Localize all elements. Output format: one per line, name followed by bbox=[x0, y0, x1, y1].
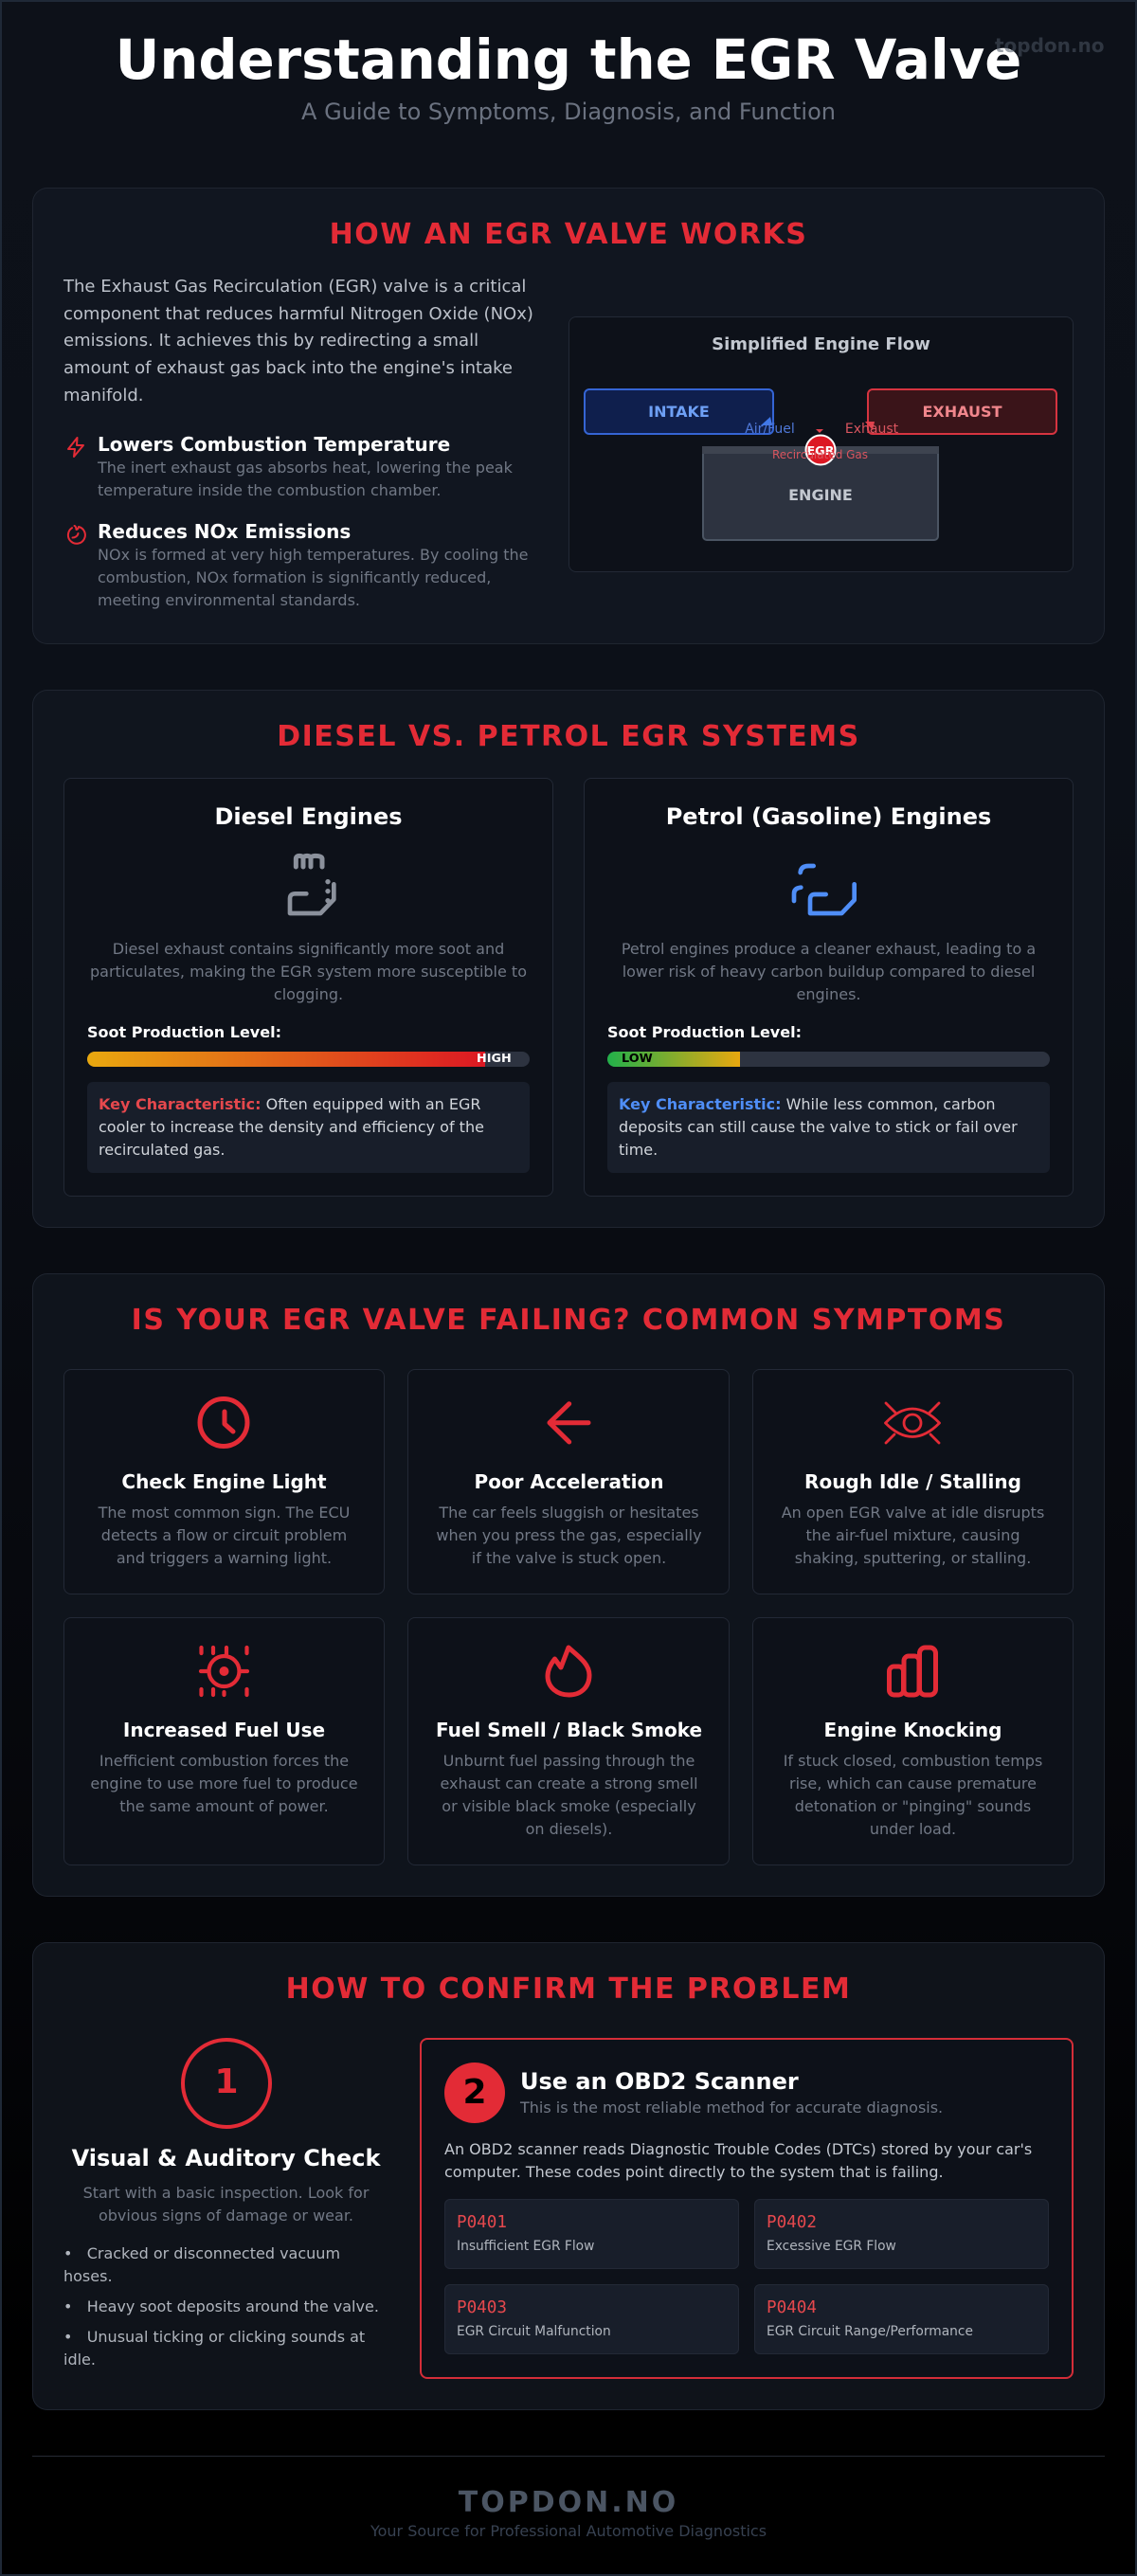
meaning: EGR Circuit Malfunction bbox=[457, 2324, 611, 2339]
bullet 3 bbox=[63, 2328, 365, 2369]
description bbox=[622, 940, 1036, 1003]
EGR valve: EGR bbox=[806, 444, 835, 459]
intro text: emissions. It achieves this by redirecting a small bbox=[63, 331, 478, 351]
step 2 badge: 2 bbox=[462, 2073, 487, 2112]
key text: Key Characteristic: Often equipped with an EGR bbox=[99, 1095, 481, 1113]
symptom title: Increased Fuel Use bbox=[123, 1719, 325, 1741]
icon: gauge gear bbox=[199, 1645, 250, 1698]
icon: flame bbox=[546, 1645, 591, 1698]
symptom text: the same amount of power. bbox=[119, 1797, 329, 1815]
heading: HOW TO CONFIRM THE PROBLEM bbox=[286, 1973, 851, 2006]
icon: diesel pump bbox=[288, 853, 336, 915]
benefit description: NOx is formed at very high temperatures. By cooling the bbox=[98, 546, 528, 564]
symptom text: or visible black smoke (especially bbox=[442, 1797, 696, 1815]
step 1: visual check bbox=[63, 2038, 381, 2369]
heading: DIESEL VS. PETROL EGR SYSTEMS bbox=[277, 720, 860, 753]
key characteristic bbox=[87, 1082, 530, 1173]
symptom text: detects a flow or circuit problem bbox=[101, 1526, 347, 1544]
heading: IS YOUR EGR VALVE FAILING? COMMON SYMPTOMS bbox=[132, 1304, 1005, 1337]
symptom text: when you press the gas, especially bbox=[436, 1526, 702, 1544]
symptom text bbox=[782, 1504, 1044, 1567]
symptom text: detonation or "pinging" sounds bbox=[795, 1797, 1031, 1815]
flow arrows bbox=[761, 417, 875, 433]
code P0403 bbox=[444, 2284, 739, 2354]
benefit description bbox=[97, 459, 513, 499]
symptom text: if the valve is stuck open. bbox=[472, 1549, 666, 1567]
code: P0403 bbox=[457, 2298, 507, 2317]
soot bar: low bbox=[607, 1052, 1050, 1067]
code: P0404 bbox=[767, 2298, 817, 2317]
key text: deposits can still cause the valve to stick or fail over bbox=[619, 1118, 1018, 1136]
symptom text: and triggers a warning light. bbox=[117, 1549, 332, 1567]
symptom: check engine light bbox=[63, 1369, 385, 1594]
benefit description bbox=[98, 546, 528, 609]
diagram title: Simplified Engine Flow bbox=[712, 334, 930, 354]
description: clogging. bbox=[274, 985, 343, 1003]
symptom text: An open EGR valve at idle disrupts bbox=[782, 1504, 1044, 1522]
icon: clock bbox=[197, 1396, 250, 1449]
engine box bbox=[702, 446, 939, 540]
symptom: increased fuel use bbox=[63, 1617, 385, 1865]
panel: simplified engine flow diagram bbox=[568, 316, 1074, 572]
icon: eye bbox=[884, 1402, 941, 1444]
symptom text: the air-fuel mixture, causing bbox=[805, 1526, 1020, 1544]
symptom: rough idle bbox=[752, 1369, 1074, 1594]
symptom text: The car feels sluggish or hesitates bbox=[439, 1504, 699, 1522]
EGR valve bbox=[805, 436, 836, 464]
bullet 1: • Cracked or disconnected vacuum bbox=[63, 2244, 340, 2262]
symptom text: Unburnt fuel passing through the bbox=[443, 1752, 695, 1770]
step 1 text: Start with a basic inspection. Look for bbox=[83, 2184, 369, 2202]
step 2 subtitle: This is the most reliable method for accurate diagnosis. bbox=[520, 2099, 943, 2117]
heading: HOW AN EGR VALVE WORKS bbox=[330, 218, 807, 251]
symptom text: on diesels). bbox=[526, 1820, 612, 1838]
soot label: Soot Production Level: bbox=[607, 1023, 802, 1041]
icon: flame in circle bbox=[66, 525, 86, 545]
symptom text bbox=[436, 1504, 702, 1567]
key text: cooler to increase the density and efficiency of the bbox=[99, 1118, 484, 1136]
step 2 text: An OBD2 scanner reads Diagnostic Trouble Codes (DTCs) stored by your car's bbox=[444, 2140, 1032, 2158]
symptom title: Engine Knocking bbox=[824, 1719, 1002, 1741]
exhaust box: EXHAUST bbox=[923, 403, 1002, 421]
panel: diesel vs petrol bbox=[32, 690, 1105, 1228]
meaning: EGR Circuit Range/Performance bbox=[767, 2324, 973, 2339]
step 1 text: obvious signs of damage or wear. bbox=[99, 2207, 353, 2225]
intro text: The Exhaust Gas Recirculation (EGR) valve is a critical bbox=[63, 277, 526, 297]
intro text bbox=[63, 277, 533, 405]
panel: diesel engines bbox=[63, 778, 553, 1197]
watermark: topdon.no bbox=[995, 34, 1105, 57]
key text bbox=[99, 1095, 484, 1159]
benefit description: temperature inside the combustion chamber. bbox=[98, 481, 442, 499]
bar label: LOW bbox=[622, 1052, 653, 1066]
step 1 title: Visual & Auditory Check bbox=[72, 2145, 380, 2171]
description: Diesel exhaust contains significantly more soot and bbox=[113, 940, 504, 958]
description: engines. bbox=[796, 985, 860, 1003]
symptom: engine knocking bbox=[752, 1617, 1074, 1865]
code: P0402 bbox=[767, 2213, 817, 2232]
bullet 3: idle. bbox=[63, 2351, 96, 2369]
symptom text: shaking, sputtering, or stalling. bbox=[795, 1549, 1031, 1567]
symptom text: engine to use more fuel to produce bbox=[90, 1774, 358, 1792]
description: Petrol engines produce a cleaner exhaust, leading to a bbox=[622, 940, 1036, 958]
flow chart bbox=[584, 388, 1057, 541]
symptom title: Poor Acceleration bbox=[475, 1470, 663, 1493]
panel: how an EGR valve works bbox=[32, 188, 1105, 644]
panel: how to confirm bbox=[32, 1942, 1105, 2410]
step 1 badge: 1 bbox=[214, 2063, 239, 2101]
bullet 1: hoses. bbox=[63, 2267, 113, 2285]
code: P0401 bbox=[457, 2213, 507, 2232]
benefit description: combustion, NOx formation is significantly reduced, bbox=[98, 568, 491, 586]
benefit heading: Lowers Combustion Temperature bbox=[98, 433, 450, 456]
engine box: ENGINE bbox=[788, 486, 853, 504]
bar label: HIGH bbox=[477, 1052, 512, 1066]
symptom title: Check Engine Light bbox=[121, 1470, 327, 1493]
key characteristic bbox=[607, 1082, 1050, 1173]
step 2: OBD2 scanner bbox=[420, 2038, 1074, 2379]
code P0402 bbox=[754, 2199, 1049, 2269]
flow labels: Recirculated Gas bbox=[772, 448, 868, 461]
key text: time. bbox=[619, 1141, 658, 1159]
symptom title: Fuel Smell / Black Smoke bbox=[436, 1719, 702, 1741]
step 2 text bbox=[444, 2140, 1032, 2181]
bullet list bbox=[63, 2244, 379, 2369]
card heading: Petrol (Gasoline) Engines bbox=[666, 803, 991, 830]
symptom text: Inefficient combustion forces the bbox=[99, 1752, 349, 1770]
bullet 3: • Unusual ticking or clicking sounds at bbox=[63, 2328, 365, 2346]
footer brand: TOPDON.NO bbox=[459, 2486, 678, 2519]
card heading: Diesel Engines bbox=[214, 803, 403, 830]
intake box: INTAKE bbox=[648, 403, 710, 421]
bullet 2: • Heavy soot deposits around the valve. bbox=[63, 2297, 379, 2315]
symptom title: Rough Idle / Stalling bbox=[804, 1470, 1021, 1493]
symptom text: exhaust can create a strong smell bbox=[440, 1774, 698, 1792]
symptom text: The most common sign. The ECU bbox=[99, 1504, 350, 1522]
description: particulates, making the EGR system more susceptible to bbox=[90, 963, 527, 981]
symptom text: If stuck closed, combustion temps bbox=[784, 1752, 1042, 1770]
intro text: amount of exhaust gas back into the engine's intake bbox=[63, 358, 513, 378]
benefit: lowers combustion temperature bbox=[97, 433, 513, 499]
benefit description: meeting environmental standards. bbox=[98, 591, 360, 609]
panel: petrol engines bbox=[584, 778, 1074, 1197]
flow labels: Air/Fuel bbox=[745, 422, 795, 437]
exhaust box bbox=[868, 389, 1056, 434]
step 1 badge bbox=[181, 2038, 272, 2129]
flow labels bbox=[745, 422, 899, 461]
bar fill 30% bbox=[607, 1052, 740, 1067]
intro text: component that reduces harmful Nitrogen Oxide (NOx) bbox=[63, 304, 533, 324]
key text: Key Characteristic: While less common, carbon bbox=[619, 1095, 996, 1113]
intake box bbox=[585, 389, 773, 434]
key text bbox=[619, 1095, 1018, 1159]
symptom: poor acceleration bbox=[407, 1369, 730, 1594]
icon: bars bbox=[887, 1645, 938, 1698]
soot label: Soot Production Level: bbox=[87, 1023, 281, 1041]
bullet 1 bbox=[63, 2244, 340, 2285]
symptom text: under load. bbox=[870, 1820, 956, 1838]
code P0404 bbox=[754, 2284, 1049, 2354]
symptom text: rise, which can cause premature bbox=[789, 1774, 1037, 1792]
icon: left arrow bbox=[548, 1401, 591, 1444]
subtitle: A Guide to Symptoms, Diagnosis, and Function bbox=[301, 99, 836, 125]
symptom text bbox=[440, 1752, 698, 1838]
benefit: reduces NOx emissions bbox=[98, 520, 528, 609]
step 1 text bbox=[83, 2184, 370, 2225]
step 2 text: computer. These codes point directly to the system that is failing. bbox=[444, 2163, 944, 2181]
bar fill 90% bbox=[87, 1052, 485, 1067]
symptom: fuel smell bbox=[407, 1617, 730, 1865]
symptom text bbox=[99, 1504, 350, 1567]
footer tagline: Your Source for Professional Automotive Diagnostics bbox=[370, 2522, 767, 2540]
symptom text bbox=[90, 1752, 358, 1815]
flow labels: Exhaust bbox=[845, 422, 899, 437]
benefit heading: Reduces NOx Emissions bbox=[98, 520, 351, 543]
meaning: Excessive EGR Flow bbox=[767, 2239, 896, 2254]
panel: common symptoms bbox=[32, 1273, 1105, 1897]
step 2 badge bbox=[444, 2063, 505, 2123]
icon: lightning bolt bbox=[67, 437, 84, 458]
intro text: manifold. bbox=[63, 386, 143, 405]
benefit description: The inert exhaust gas absorbs heat, lowering the peak bbox=[98, 459, 513, 477]
description: lower risk of heavy carbon buildup compared to diesel bbox=[623, 963, 1035, 981]
description bbox=[90, 940, 527, 1003]
key text: recirculated gas. bbox=[99, 1141, 225, 1159]
symptom text bbox=[784, 1752, 1042, 1838]
icon: petrol pump bbox=[792, 864, 857, 915]
meaning: Insufficient EGR Flow bbox=[457, 2239, 594, 2254]
title: Understanding the EGR Valve bbox=[116, 28, 1021, 92]
step 2 title: Use an OBD2 Scanner bbox=[520, 2068, 799, 2095]
soot bar: high bbox=[87, 1052, 530, 1067]
code P0401 bbox=[444, 2199, 739, 2269]
